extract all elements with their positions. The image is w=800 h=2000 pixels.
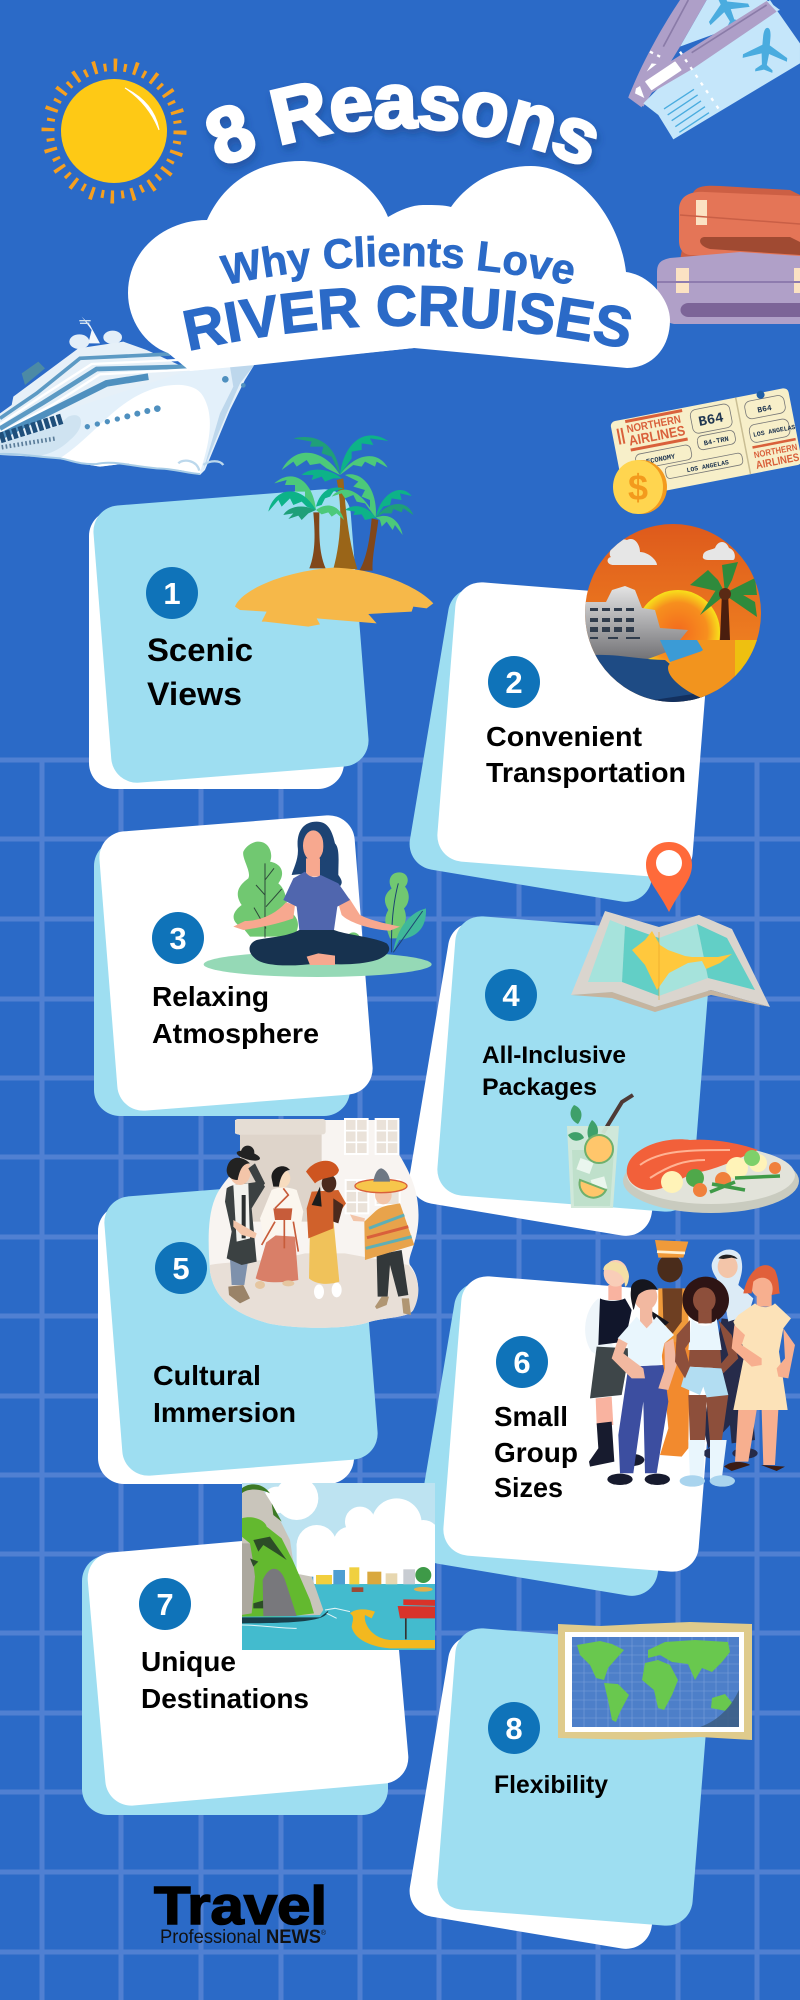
label: Unique Destinations: Unique	[141, 1646, 236, 1677]
label: All-Inclusive Packages: Packages	[482, 1074, 597, 1101]
icon: boarding pass with coin: ECONOMY	[646, 453, 677, 467]
title: 8 Reasons: 8 Reasons	[206, 82, 600, 172]
icon: world map	[558, 1622, 752, 1740]
label: Cultural Immersion: Immersion	[153, 1397, 296, 1428]
label: Convenient Transportation: Convenient	[486, 721, 642, 752]
label: All-Inclusive Packages: All-Inclusive	[482, 1042, 626, 1069]
icon: boarding pass with coin: B64	[757, 404, 773, 416]
label: Small Group Sizes: Small	[494, 1401, 568, 1432]
logo: Travel Professional News: ®	[321, 1929, 327, 1937]
label: Scenic Views: Scenic	[147, 632, 253, 668]
icon: boarding pass with coin: $	[628, 467, 648, 508]
woman red hair	[724, 1265, 795, 1471]
icon: palm island	[235, 435, 433, 627]
number badge 8: 8	[505, 1711, 523, 1746]
panel: card 4 All-Inclusive Packages	[406, 914, 713, 1240]
icon: map pin	[646, 842, 692, 912]
illustration: meditating woman	[204, 822, 432, 977]
label: Scenic Views: Views	[147, 676, 242, 712]
image: tropical destination scene	[242, 1483, 435, 1650]
number badge 1: 1	[163, 576, 181, 611]
label: Convenient Transportation: Transportation	[486, 757, 686, 788]
image: sunset cruise circle	[585, 524, 761, 702]
panel: card 6 Small Group Sizes	[412, 1274, 719, 1600]
label: Cultural Immersion: Cultural	[153, 1360, 261, 1391]
label: Relaxing Atmosphere: Atmosphere	[152, 1018, 319, 1049]
number badge 3: 3	[169, 921, 187, 956]
icon: boarding pass with coin: NORTHERN	[626, 414, 682, 436]
illustration: group of women	[585, 1240, 795, 1487]
number badge 5	[155, 1242, 207, 1294]
icon: cruise ship	[0, 317, 254, 475]
person 4	[350, 1168, 414, 1315]
icon: boarding pass with coin	[610, 385, 800, 514]
woman curly hair	[675, 1277, 738, 1487]
icon: boarding pass with coin: B64	[697, 410, 725, 431]
icon: sun	[48, 65, 180, 197]
icon: boarding pass with coin: AIRLINES	[627, 422, 686, 449]
label: Unique Destinations: Destinations	[141, 1683, 309, 1714]
logo: Travel Professional News: Professional NEWS	[160, 1927, 323, 1948]
number badge 6	[496, 1336, 548, 1388]
icon: boarding pass with coin: B4-TRN	[703, 436, 730, 448]
label: Relaxing Atmosphere: Relaxing	[152, 981, 269, 1012]
number badge 7	[139, 1578, 191, 1630]
number badge 2	[488, 656, 540, 708]
number badge 4: 4	[502, 978, 520, 1013]
woman hijab	[703, 1249, 758, 1459]
panel: card 3 Relaxing Atmosphere	[94, 813, 375, 1116]
label: Flexibility: Flexibility	[494, 1771, 608, 1799]
number badge 3	[152, 912, 204, 964]
number badge 1	[146, 567, 198, 619]
icon: suitcases	[657, 186, 800, 324]
title: river cruises: RIVER CRUISES	[183, 285, 632, 351]
person 2	[255, 1166, 303, 1289]
number badge 4	[485, 969, 537, 1021]
label: Small Group Sizes: Group	[494, 1437, 578, 1468]
person 3	[306, 1161, 346, 1299]
woman front white tee	[607, 1279, 677, 1485]
illustration: cultural group	[209, 1119, 419, 1328]
panel: card 8 Flexibility	[406, 1626, 713, 1953]
icon: boarding pass with coin: LOS ANGELAS	[753, 424, 796, 439]
icon: salmon plate	[623, 1139, 799, 1213]
person 1	[225, 1146, 265, 1303]
panel: card 5 Cultural Immersion	[98, 1178, 380, 1484]
icon: cocktail	[567, 1095, 633, 1208]
icon: plane tickets	[628, 0, 800, 139]
number badge 5: 5	[172, 1251, 190, 1286]
woman blonde	[585, 1260, 644, 1467]
label: Small Group Sizes: Sizes	[494, 1472, 563, 1503]
logo: Travel Professional News: Travel	[154, 1876, 327, 1936]
icon: folded map	[571, 911, 770, 1012]
number badge 8	[488, 1702, 540, 1754]
woman headdress	[655, 1240, 690, 1457]
subtitle: Why Clients Love	[218, 236, 574, 284]
number badge 6: 6	[513, 1345, 531, 1380]
panel: card 1 Scenic Views	[89, 487, 371, 789]
number badge 7: 7	[156, 1587, 174, 1622]
panel: card 7 Unique Destinations	[82, 1528, 410, 1815]
icon: boarding pass with coin: LOS ANGELAS	[686, 459, 730, 474]
panel: card 2 Convenient Transportation	[406, 580, 713, 906]
number badge 2: 2	[505, 665, 523, 700]
cloud banner	[128, 161, 670, 371]
